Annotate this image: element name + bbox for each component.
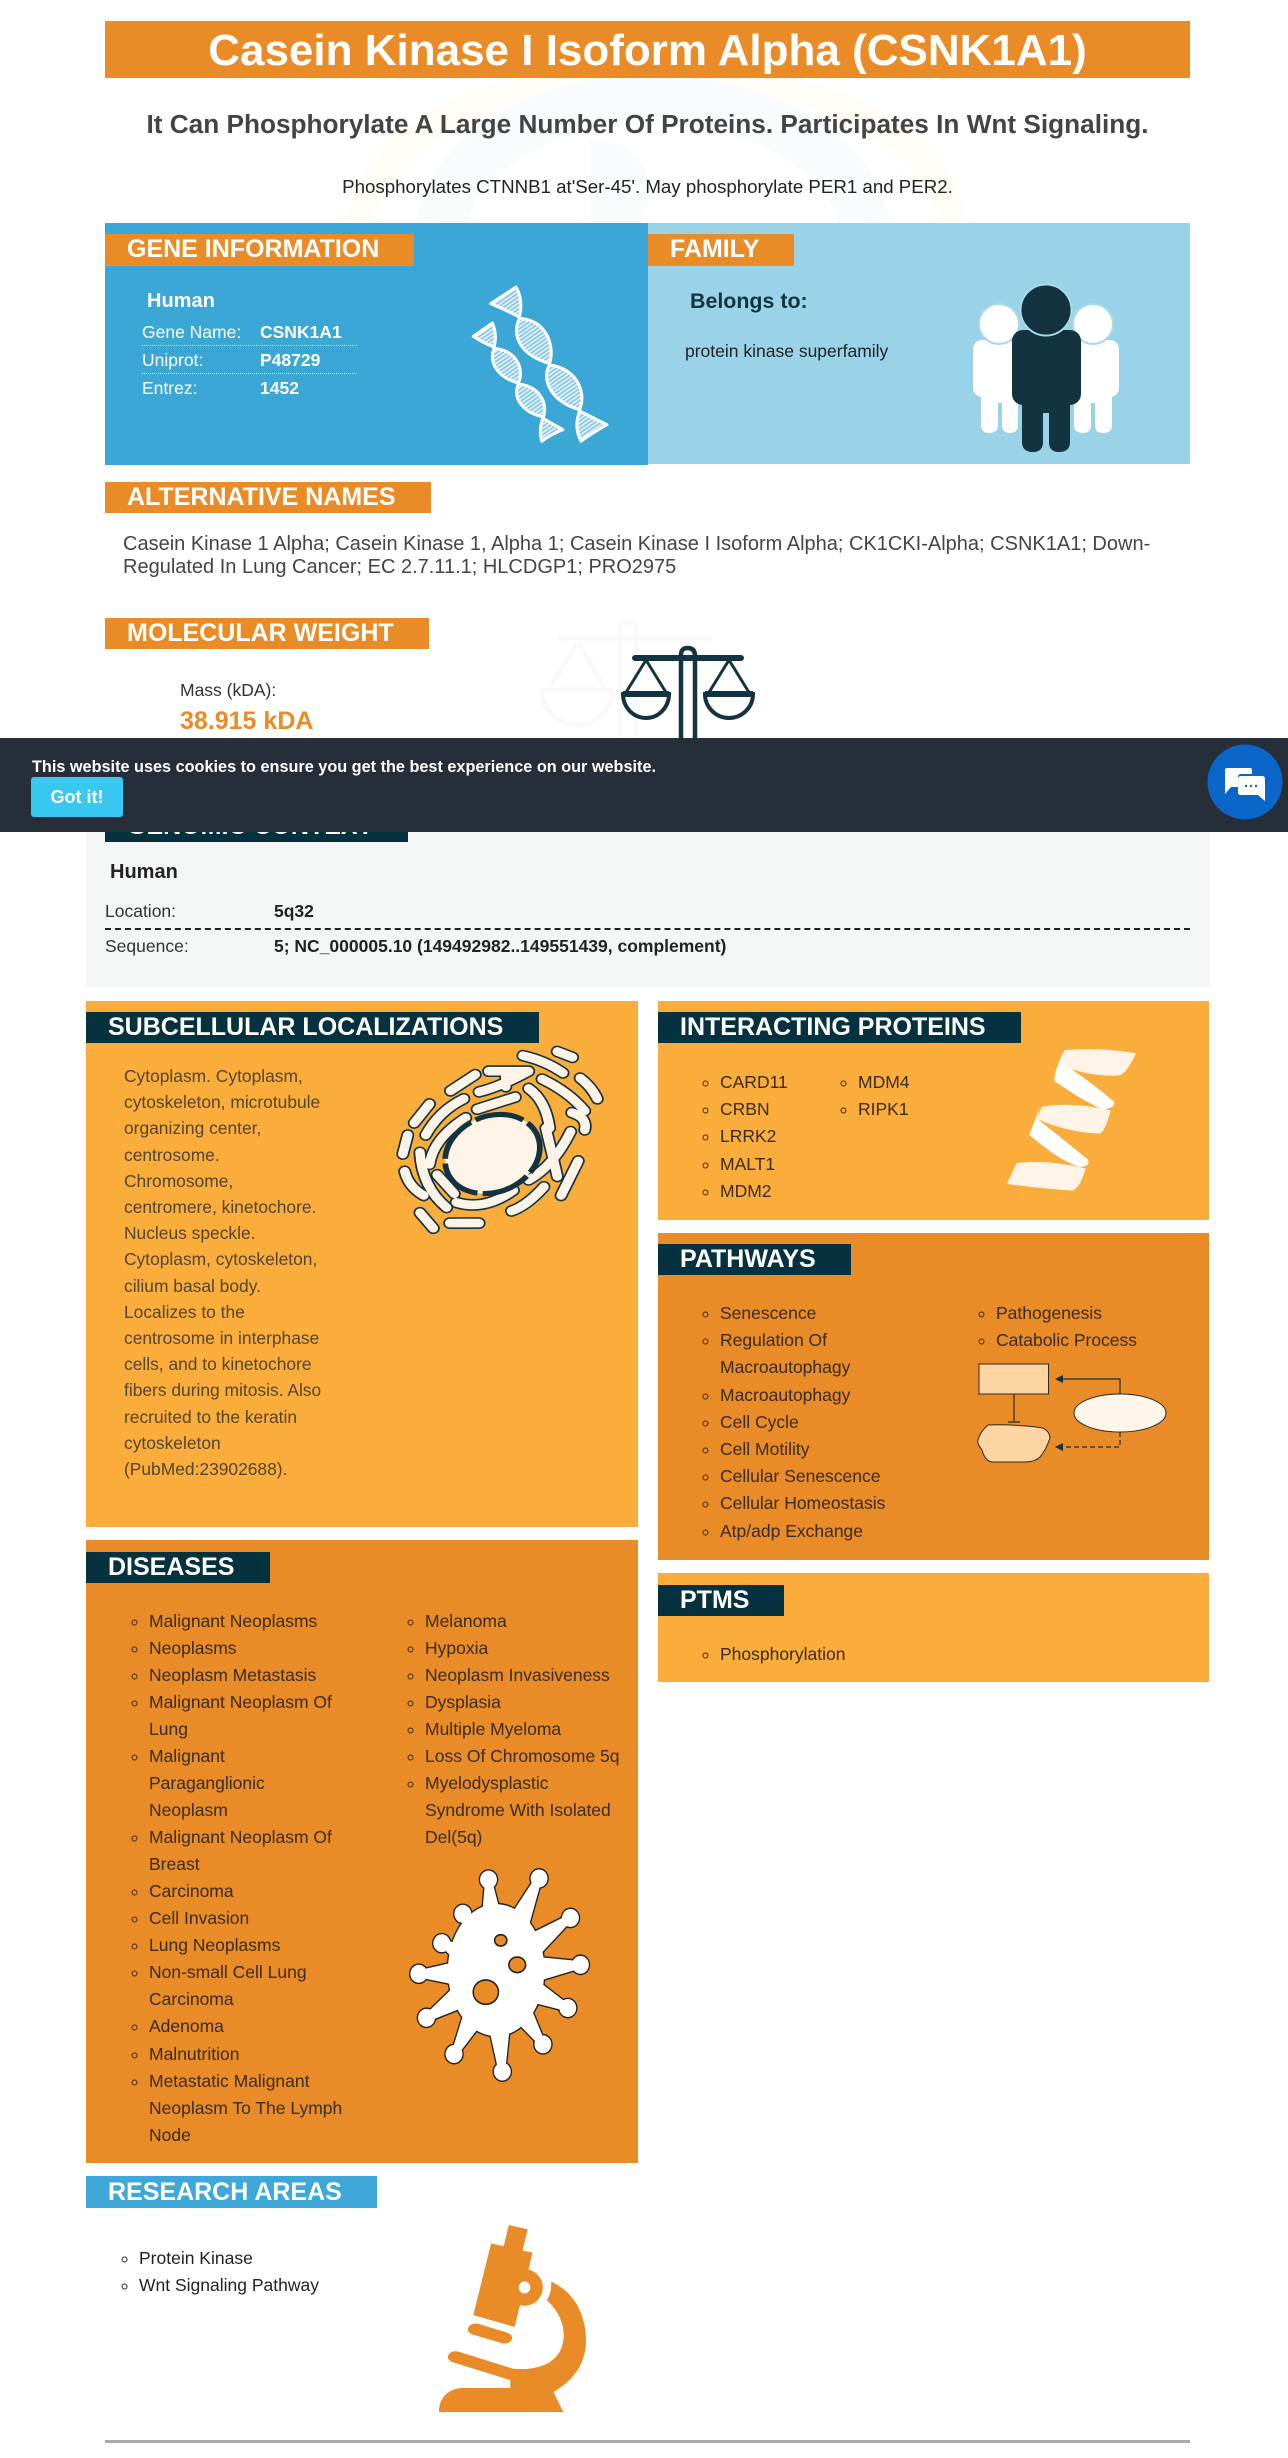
- entrez row: Entrez:: [142, 378, 197, 398]
- protein list column 1: LRRK2: [720, 1126, 776, 1146]
- panel: pathways: [658, 1233, 1209, 1560]
- uniprot row: Uniprot:: [142, 350, 203, 370]
- disease list column 2: Neoplasm Invasiveness: [425, 1665, 610, 1685]
- pathway list column 1: Regulation Of: [720, 1330, 827, 1350]
- disease list column 1: Carcinoma: [149, 1989, 234, 2009]
- panel: PTMs: [658, 1573, 1209, 1682]
- disease list column 2: [408, 1611, 620, 1847]
- localization text: organizing center,: [124, 1118, 261, 1138]
- heading: family: [648, 234, 794, 265]
- heading: alternative names: ALTERNATIVE NAMES: [127, 483, 396, 511]
- localization text: (PubMed:23902688).: [124, 1459, 287, 1479]
- diagram: pathway schematic: [977, 1364, 1166, 1462]
- disease list column 2: Melanoma: [425, 1611, 507, 1631]
- localization text: Nucleus speckle.: [124, 1223, 255, 1243]
- heading: diseases: [86, 1552, 270, 1583]
- description: Phosphorylates CTNNB1 at'Ser-45'. May phosphorylate PER1 and PER2.: [342, 176, 953, 197]
- disease list column 1: Lung: [149, 1719, 188, 1739]
- disease list column 1: Metastatic Malignant: [149, 2071, 310, 2091]
- protein list column 1: CRBN: [720, 1099, 770, 1119]
- icon: microscope: [439, 2225, 586, 2412]
- location row: 5q32: [274, 901, 314, 921]
- heading: diseases: DISEASES: [108, 1553, 234, 1581]
- heading: pathways: PATHWAYS: [680, 1245, 816, 1273]
- heading: PTMs: [658, 1585, 784, 1616]
- pathway list column 1: [702, 1303, 885, 1541]
- species label: Human: [110, 861, 178, 883]
- disease list column 1: [132, 1611, 342, 2145]
- localization text: cilium basal body.: [124, 1276, 261, 1296]
- disease list column 1: Adenoma: [149, 2016, 224, 2036]
- pathway list column 1: Cellular Homeostasis: [720, 1493, 885, 1513]
- research list: [122, 2248, 319, 2295]
- mass value: 38.915 kDA: [180, 707, 313, 735]
- disease list column 1: Neoplasms: [149, 1638, 237, 1658]
- panel: gene information: [105, 223, 648, 465]
- heading: family: FAMILY: [670, 235, 759, 263]
- research list: Wnt Signaling Pathway: [139, 2275, 319, 2295]
- research list: Protein Kinase: [139, 2248, 253, 2268]
- disease list column 2: Hypoxia: [425, 1638, 488, 1658]
- localization text: recruited to the keratin: [124, 1407, 297, 1427]
- disease list column 1: Malnutrition: [149, 2044, 239, 2064]
- protein list column 1: CARD11: [720, 1072, 788, 1092]
- disease list column 1: Malignant Neoplasm Of: [149, 1827, 332, 1847]
- heading: pathways: [658, 1244, 851, 1275]
- localization text: cytoskeleton, microtubule: [124, 1092, 320, 1112]
- entrez row: [142, 378, 299, 398]
- pathway list column 1: Cell Cycle: [720, 1412, 799, 1432]
- disease list column 1: Neoplasm: [149, 1800, 228, 1820]
- location row: Location:: [105, 901, 176, 921]
- disease list column 1: Malignant Neoplasms: [149, 1611, 317, 1631]
- entrez row: 1452: [260, 378, 299, 398]
- panel: diseases: [86, 1540, 638, 2163]
- species label: Human: [147, 290, 215, 312]
- pathway list column 1: Cell Motility: [720, 1439, 809, 1459]
- sequence row: 5; NC_000005.10 (149492982..149551439, complement): [274, 936, 726, 956]
- panel: subcellular localizations: [86, 1001, 638, 1527]
- cookie message: This website uses cookies to ensure you get the best experience on our website.: [32, 758, 656, 776]
- pathway list column 1: Macroautophagy: [720, 1357, 850, 1377]
- icon: people: [973, 284, 1119, 452]
- localization text: Cytoplasm. Cytoplasm,: [124, 1066, 303, 1086]
- uniprot row: P48729: [260, 350, 320, 370]
- icon: protein ribbon: [1007, 1049, 1136, 1191]
- pathway list column 2: Pathogenesis: [996, 1303, 1102, 1323]
- disease list column 1: Lung Neoplasms: [149, 1935, 280, 1955]
- button: got it: [31, 777, 123, 817]
- pathway list column 1: Senescence: [720, 1303, 816, 1323]
- disease list column 2: Multiple Myeloma: [425, 1719, 561, 1739]
- heading: molecular weight: MOLECULAR WEIGHT: [127, 619, 394, 647]
- subtitle: It Can Phosphorylate A Large Number Of Proteins. Participates In Wnt Signaling.: [146, 109, 1149, 139]
- title: [105, 21, 1190, 78]
- heading: gene information: GENE INFORMATION: [127, 235, 379, 263]
- icon: cell: [396, 1046, 604, 1234]
- localization text: cytoskeleton: [124, 1433, 221, 1453]
- disease list column 1: Carcinoma: [149, 1881, 234, 1901]
- gene name row: [142, 320, 357, 346]
- disease list column 1: Malignant Neoplasm Of: [149, 1692, 332, 1712]
- disease list column 2: Dysplasia: [425, 1692, 501, 1712]
- location row: [105, 899, 1190, 930]
- PTM list: Phosphorylation: [720, 1644, 846, 1664]
- icon: virus: [409, 1868, 590, 2082]
- sequence row: Sequence:: [105, 936, 189, 956]
- icon: faint scale: [540, 620, 690, 738]
- localization text: Cytoplasm, cytoskeleton,: [124, 1249, 317, 1269]
- protein list column 1: MALT1: [720, 1154, 775, 1174]
- title: Casein Kinase I Isoform Alpha (CSNK1A1): [208, 26, 1087, 75]
- footer rule: [105, 2440, 1190, 2443]
- disease list column 2: Myelodysplastic: [425, 1773, 549, 1793]
- disease list column 2: Syndrome With Isolated: [425, 1800, 611, 1820]
- localization text: centrosome in interphase: [124, 1328, 319, 1348]
- disease list column 2: Loss Of Chromosome 5q: [425, 1746, 620, 1766]
- family value: protein kinase superfamily: [685, 341, 888, 361]
- disease list column 1: Paraganglionic: [149, 1773, 265, 1793]
- pathway list column 1: Cellular Senescence: [720, 1466, 881, 1486]
- alternative names text: Casein Kinase 1 Alpha; Casein Kinase 1, Alpha 1; Casein Kinase I Isoform Alpha; CK1CKI-Alpha; CSNK1A1; Down-Regulated In Lung Cancer; EC 2.7.11.1; HLCDGP1; PRO2975: [123, 533, 1150, 578]
- disease list column 1: Non-small Cell Lung: [149, 1962, 307, 1982]
- panel: interacting proteins: [658, 1001, 1209, 1220]
- heading: interacting proteins: INTERACTING PROTEINS: [680, 1013, 986, 1041]
- heading: genomic context: GENOMIC CONTEXT: [127, 812, 373, 840]
- localization text: cells, and to kinetochore: [124, 1354, 312, 1374]
- button: got it: Got it!: [50, 787, 103, 807]
- protein list column 2: [840, 1072, 910, 1119]
- pathway list column 1: Atp/adp Exchange: [720, 1521, 863, 1541]
- disease list column 1: Breast: [149, 1854, 200, 1874]
- disease list column 1: Malignant: [149, 1746, 225, 1766]
- pathway list column 1: Macroautophagy: [720, 1385, 850, 1405]
- disease list column 2: Del(5q): [425, 1827, 482, 1847]
- protein list column 1: MDM2: [720, 1181, 772, 1201]
- heading: research areas: RESEARCH AREAS: [108, 2178, 342, 2206]
- localization text: fibers during mitosis. Also: [124, 1380, 321, 1400]
- disease list column 1: Neoplasm Metastasis: [149, 1665, 316, 1685]
- protein list column 2: RIPK1: [858, 1099, 909, 1119]
- icon: chat button: [1208, 744, 1282, 820]
- gene name row: Gene Name:: [142, 322, 241, 342]
- icon: DNA helix: [472, 285, 608, 443]
- localization text: centrosome.: [124, 1145, 220, 1165]
- protein list column 1: [702, 1072, 788, 1201]
- disease list column 1: Neoplasm To The Lymph: [149, 2098, 342, 2118]
- cookie banner: [0, 738, 1288, 832]
- panel: genomic context: [86, 800, 1210, 987]
- localization text: Localizes to the: [124, 1302, 245, 1322]
- heading: subcellular localizations: SUBCELLULAR LOCALIZATIONS: [108, 1013, 503, 1041]
- pathway list column 2: Catabolic Process: [996, 1330, 1137, 1350]
- pathway list column 2: [978, 1303, 1137, 1350]
- protein list column 2: MDM4: [858, 1072, 910, 1092]
- heading: PTMs: PTMS: [680, 1586, 749, 1614]
- disease list column 1: Cell Invasion: [149, 1908, 249, 1928]
- localization text: centromere, kinetochore.: [124, 1197, 316, 1217]
- icon: balance scale: [621, 646, 755, 738]
- localization text: [124, 1066, 321, 1479]
- gene name row: CSNK1A1: [260, 322, 342, 342]
- belongs to label: Belongs to:: [690, 289, 808, 313]
- watermark: faint arcs behind heading: [348, 78, 967, 223]
- panel: family: [648, 223, 1190, 464]
- localization text: Chromosome,: [124, 1171, 233, 1191]
- mass label: Mass (kDA):: [180, 680, 276, 700]
- uniprot row: [142, 348, 357, 374]
- disease list column 1: Node: [149, 2125, 191, 2145]
